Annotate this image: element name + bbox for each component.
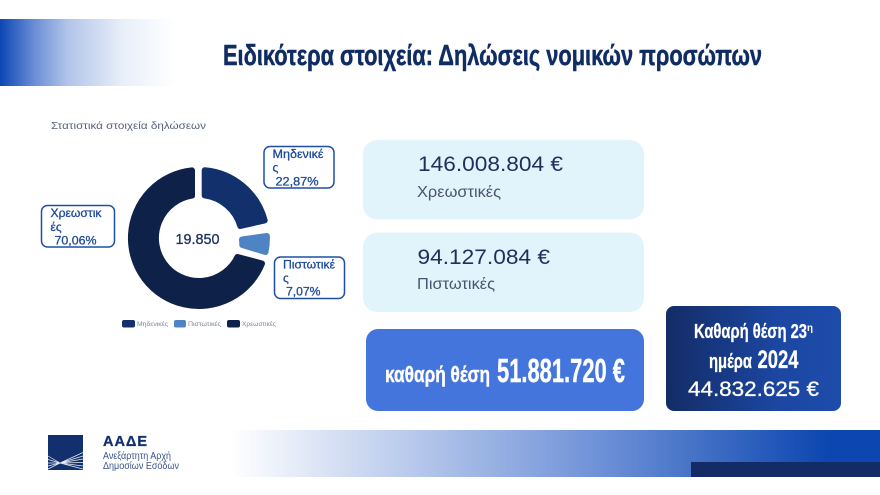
callout: Χρεωστικές: Χρεωστικ (50, 206, 102, 220)
credit amount: 94.127.084 € (418, 245, 550, 269)
comparison year: 2024 (758, 346, 799, 374)
donut chart (131, 170, 267, 306)
callout: Χρεωστικές: ές (50, 220, 62, 234)
organisation full name (103, 450, 179, 472)
segment: Χρεωστικές (131, 170, 262, 306)
chart heading: Στατιστικά στοιχεία δηλώσεων (51, 120, 206, 132)
callout: Μηδενικές: ς (272, 160, 278, 174)
credit label: Πιστωτικές (417, 276, 495, 293)
callout: Πιστωτικές: ς (283, 271, 289, 285)
bottom dark bar (691, 462, 880, 477)
segment: Πιστωτικές (242, 236, 267, 252)
panel: net position on day 23 of 2024 (666, 306, 841, 411)
comparison amount: 44.832.625 € (688, 378, 819, 401)
panel: net position (366, 329, 644, 411)
icon: AADE emblem (48, 435, 83, 470)
organisation full name: Ανεξάρτητη Αρχή (103, 450, 171, 462)
net position label: καθαρή θέση (385, 362, 490, 387)
top-left gradient band (0, 19, 176, 86)
callout: Μηδενικές (264, 146, 334, 188)
donut centre total: 19.850 (176, 231, 220, 248)
logo (48, 434, 179, 472)
debit amount: 146.008.804 € (418, 152, 563, 176)
callout: Χρεωστικές (42, 206, 114, 248)
callout: Πιστωτικές: Πιστωτικέ (283, 258, 336, 272)
net position amount: 51.881.720 € (497, 352, 625, 389)
panel: declaration statistics donut chart (42, 120, 344, 328)
panel: debit total (363, 140, 644, 220)
chart legend: Πιστωτικές (188, 321, 221, 328)
callout: Μηδενικές: Μηδενικέ (272, 147, 324, 161)
chart legend: Μηδενικές (137, 321, 168, 328)
organisation name: ΑΑΔΕ (103, 434, 147, 450)
chart legend: Χρεωστικές (242, 321, 276, 328)
debit label: Χρεωστικές (417, 184, 501, 201)
organisation full name: Δημοσίων Εσόδων (103, 460, 179, 472)
comparison heading line 1: Καθαρή θέση 23 (694, 320, 807, 343)
superscript: η (807, 323, 813, 334)
callout: Πιστωτικές (274, 257, 344, 298)
comparison heading line 2: ημέρα (709, 350, 752, 373)
callout: Χρεωστικές: 70,06% (54, 234, 97, 248)
segment: Μηδενικές (205, 170, 265, 226)
panel: credit total (363, 232, 644, 312)
bottom gradient band (230, 430, 880, 477)
callout: Πιστωτικές: 7,07% (286, 284, 321, 298)
chart legend (122, 320, 276, 328)
callout: Μηδενικές: 22,87% (276, 174, 319, 188)
